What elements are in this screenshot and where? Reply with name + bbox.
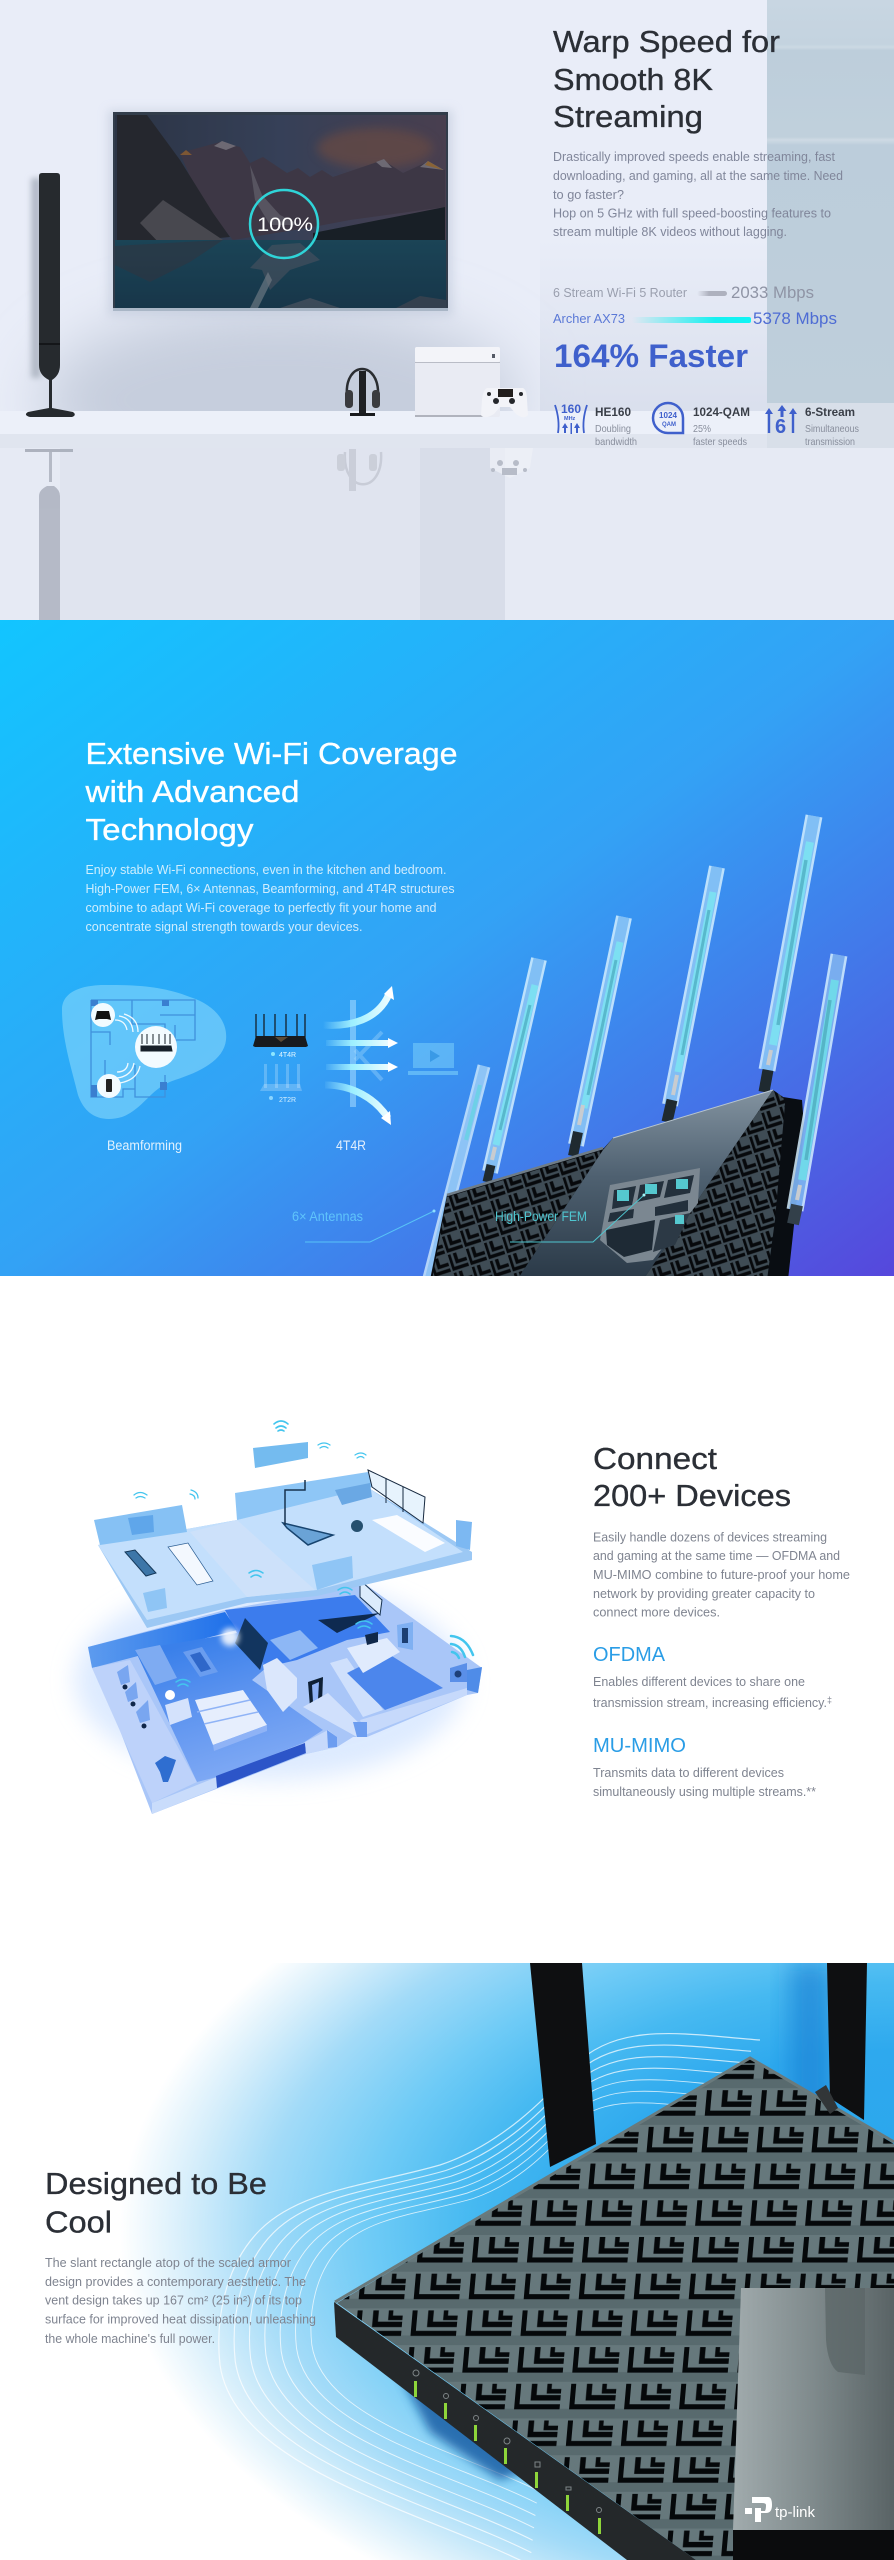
- glass panels: [360, 1580, 382, 1615]
- gamepad: [95, 1011, 111, 1020]
- floor plan lines: [91, 1000, 195, 1097]
- heading: extensive coverage: [84, 736, 458, 847]
- text block: speed description: [553, 149, 843, 239]
- text block: speed description: downloading, and gaming, all at the same time. Need: [553, 168, 843, 183]
- wifi signal icons: [134, 1421, 473, 1686]
- feature: MU-MIMO: [593, 1735, 816, 1799]
- icon: 1024 QAM: [653, 403, 683, 433]
- illustration: isometric smart home: [75, 1421, 482, 1814]
- feature: 6-Stream: transmission: [805, 436, 855, 448]
- upper floor: [94, 1470, 472, 1628]
- wifi: upper right: [355, 1453, 366, 1458]
- antenna 3: [573, 917, 624, 1156]
- feature: MU-MIMO: simultaneously using multiple streams.**: [593, 1784, 816, 1799]
- lamp glow: [221, 1628, 239, 1646]
- feature: 6-Stream: [765, 405, 859, 448]
- icon: 1024 QAM: 1024: [659, 410, 677, 420]
- status icons: [413, 2370, 602, 2512]
- wall shading: [28, 311, 532, 411]
- antenna 5: [764, 816, 814, 1092]
- feature: 1024-QAM: 25%: [693, 423, 711, 435]
- icon: 160 MHz: [555, 402, 587, 434]
- bed: [195, 1690, 267, 1745]
- heading: warp speed: Warp Speed for: [553, 24, 780, 59]
- heading: connect 200+ devices: 200+ Devices: [593, 1478, 791, 1513]
- headphones reflection: [337, 449, 381, 491]
- soft glow under house: [75, 1580, 465, 1780]
- phone: [106, 1079, 112, 1092]
- wifi: large outdoor: [451, 1636, 473, 1658]
- callout: high-power FEM: [495, 1194, 646, 1242]
- right room floor: [347, 1653, 443, 1710]
- panel: warp speed streaming room scene: [0, 0, 894, 620]
- front lip: [152, 1777, 217, 1814]
- blue gradient background: [0, 620, 894, 1276]
- upper left wall: [94, 1505, 187, 1545]
- cabinets: [143, 1588, 167, 1612]
- panel: designed to be cool: [0, 1963, 894, 2560]
- device circles: [135, 1026, 177, 1068]
- shelf front: [0, 434, 767, 448]
- back wall band: [88, 1612, 237, 1668]
- feature: OFDMA: transmission stream, increasing efficiency.: [593, 1695, 827, 1710]
- bottom window: [216, 1743, 306, 1788]
- text block: coverage description: High-Power FEM, 6× Antennas, Beamforming, and 4T4R structures: [86, 881, 455, 896]
- coffee table: [183, 1647, 218, 1677]
- callout: 6× antennas: [292, 1209, 436, 1242]
- text block: device description: [593, 1530, 850, 1620]
- text block: cooling description: [45, 2255, 316, 2346]
- beam arcs: [115, 1014, 140, 1083]
- logo: tp-link: tp-link: [775, 2504, 815, 2521]
- nightstand and lamp: [165, 1698, 192, 1725]
- left walkway: [92, 1660, 197, 1803]
- feature: OFDMA: [593, 1644, 832, 1710]
- text block: cooling description: the whole machine's full power.: [45, 2331, 215, 2346]
- heading: connect 200+ devices: [593, 1441, 791, 1513]
- text block: device description: network by providing greater capacity to: [593, 1586, 815, 1601]
- feature: 1024-QAM: faster speeds: [693, 436, 747, 448]
- icon: 1024 QAM: QAM: [662, 422, 676, 428]
- heading: designed to be cool: Cool: [45, 2204, 112, 2240]
- glass panels: [368, 1470, 425, 1523]
- router base: [733, 2530, 894, 2560]
- router right vent: [643, 1090, 785, 1280]
- icon: 160 MHz: MHz: [564, 416, 576, 422]
- bar chart: speed comparison: 5378 Mbps: [753, 309, 837, 328]
- feature: HE160: Doubling: [595, 423, 631, 435]
- console reflection band: [420, 448, 505, 620]
- progress ring with 100%: [250, 190, 318, 258]
- icon: headphones: [345, 369, 380, 416]
- status LEDs: [414, 2381, 601, 2534]
- text block: device description: connect more devices.: [593, 1604, 720, 1620]
- sofa: [135, 1645, 177, 1685]
- wifi: ac: [318, 1443, 330, 1448]
- wifi: upper left: [134, 1492, 147, 1498]
- mini router: [141, 1034, 172, 1051]
- plant: [155, 1756, 176, 1782]
- router top with armor pattern: [335, 2058, 894, 2560]
- wardrobe: [397, 1622, 413, 1650]
- callout: high-power FEM: High-Power FEM: [495, 1209, 587, 1224]
- callout: 164% faster: 164% Faster: [554, 338, 748, 374]
- router body: [430, 1090, 804, 1280]
- feature: 6-Stream: Simultaneous: [805, 423, 859, 435]
- heading: warp speed: Smooth 8K: [553, 62, 713, 97]
- text block: speed description: Drastically improved speeds enable streaming, fast: [553, 149, 835, 164]
- lower floor: [88, 1580, 482, 1814]
- feature: MU-MIMO: MU-MIMO: [593, 1735, 686, 1757]
- text block: cooling description: surface for improved heat dissipation, unleashing: [45, 2312, 316, 2326]
- right front wall: [360, 1688, 467, 1735]
- text block: speed description: stream multiple 8K videos without lagging.: [553, 224, 787, 239]
- right room wall: [330, 1658, 383, 1717]
- bar chart: speed comparison: 2033 Mbps: [731, 283, 814, 302]
- antenna 2: [487, 959, 539, 1182]
- heading: extensive coverage: Extensive Wi-Fi Coverage: [86, 736, 457, 771]
- antenna 6: [793, 955, 839, 1224]
- door: [308, 1677, 323, 1707]
- router slate panel: [517, 1090, 773, 1280]
- diagram: 4T4R signal: 2T2R: [279, 1097, 296, 1104]
- text block: cooling description: The slant rectangle atop of the scaled armor: [45, 2255, 292, 2270]
- feature: OFDMA: Enables different devices to share one: [593, 1674, 805, 1689]
- wifi: gym: [190, 1490, 198, 1499]
- text block: coverage description: concentrate signal strength towards your devices.: [86, 919, 362, 934]
- heading: connect 200+ devices: Connect: [593, 1441, 717, 1476]
- heading: designed to be cool: [45, 2166, 267, 2240]
- icon: speaker: [26, 173, 75, 417]
- lower floor base: [88, 1584, 482, 1814]
- antenna right: [827, 1963, 867, 2120]
- lighter strip base: [767, 403, 894, 448]
- feature: 1024-QAM: [653, 403, 750, 448]
- router chip layout: [600, 1168, 700, 1263]
- tv stand: [235, 1618, 268, 1670]
- kitchen floor: [225, 1595, 390, 1667]
- upper right wall: [235, 1472, 372, 1520]
- bar chart: speed comparison: [553, 283, 837, 328]
- antenna 1: [428, 1066, 484, 1282]
- feature: OFDMA: OFDMA: [593, 1644, 666, 1666]
- logo: tp-link: [745, 2497, 815, 2522]
- router front edge: [334, 2302, 696, 2560]
- text block: coverage description: combine to adapt Wi-Fi coverage to perfectly fit your home and: [86, 900, 436, 915]
- text block: device description: and gaming at the same time — OFDMA and: [593, 1548, 840, 1563]
- icon: six stream arrows: 6: [775, 416, 786, 438]
- hallway wall: [303, 1693, 363, 1737]
- shelf top: [20, 411, 540, 434]
- heading: warp speed: [553, 24, 780, 134]
- heading: extensive coverage: Technology: [86, 812, 254, 847]
- front pillar: [353, 1722, 367, 1737]
- wall background: [0, 0, 767, 411]
- feature: OFDMA: ‡: [827, 1695, 832, 1705]
- speaker reflection: [25, 449, 73, 620]
- progress ring with 100%: 100%: [257, 215, 313, 236]
- text block: speed description: to go faster?: [553, 187, 624, 202]
- cabinet: [263, 1658, 297, 1712]
- tv landscape: [115, 115, 446, 308]
- ghost side arrows: [355, 1032, 382, 1080]
- router glossy plate: [733, 2288, 894, 2530]
- desk: [347, 1638, 400, 1673]
- speakers: [450, 1663, 467, 1682]
- white lounge and mat: [168, 1543, 213, 1585]
- icon: white game console: [415, 347, 500, 417]
- kitchen counter: [270, 1630, 318, 1660]
- signal wall: [350, 1000, 356, 1107]
- panel: connect devices: [0, 1276, 894, 1963]
- right end wall: [456, 1520, 472, 1550]
- right lip and pillar: [305, 1730, 337, 1754]
- diagram: 4T4R signal: 4T4R: [279, 1052, 296, 1059]
- wifi: middle: [249, 1570, 263, 1577]
- antenna 4: [667, 867, 717, 1122]
- text block: cooling description: vent design takes up 167 cm² (25 in²) of its top: [45, 2292, 302, 2308]
- feature: HE160: [554, 404, 636, 445]
- wifi: lower kitchen: [338, 1588, 352, 1594]
- text block: coverage description: [86, 862, 455, 934]
- bedroom floor: [135, 1633, 323, 1782]
- wifi: top: [274, 1421, 288, 1431]
- router shadow: [400, 2375, 530, 2480]
- icon: 160 MHz: 160: [561, 402, 581, 416]
- icon: game controller: [481, 388, 528, 417]
- chairs: [117, 1665, 150, 1723]
- label: beamforming: Beamforming: [107, 1138, 182, 1153]
- white background: [0, 1276, 894, 1963]
- television: [108, 110, 453, 316]
- text block: speed description: Hop on 5 GHz with full speed-boosting features to: [553, 206, 831, 220]
- background window strip: [767, 0, 894, 403]
- heading: warp speed: Streaming: [553, 99, 703, 134]
- text block: device description: MU-MIMO combine to future-proof your home: [593, 1567, 850, 1582]
- text block: device description: Easily handle dozens of devices streaming: [593, 1530, 827, 1544]
- icon: laptop with play button: [408, 1043, 458, 1075]
- feature: 6-Stream: 6-Stream: [805, 405, 855, 419]
- heading: extensive coverage: with Advanced: [84, 774, 300, 809]
- wifi: lower right: [356, 1621, 372, 1628]
- beam arrows: [323, 994, 392, 1118]
- label: 4T4R: 4T4R: [336, 1138, 366, 1153]
- wifi: sofa: [176, 1680, 190, 1686]
- air conditioner: [253, 1442, 308, 1468]
- router left vent: [432, 1150, 603, 1280]
- text panel shade: [540, 330, 767, 411]
- kitchen table: [318, 1613, 380, 1633]
- upper left wall tv: [128, 1515, 154, 1535]
- antenna left: [530, 1963, 596, 2167]
- antennas behind router: [428, 816, 814, 1282]
- airflow wave lines: [219, 2034, 760, 2560]
- diagram: 4T4R signal: [253, 986, 458, 1125]
- bar chart: speed comparison: 6 Stream Wi-Fi 5 Router: [553, 285, 688, 300]
- antenna connector: [815, 2085, 838, 2114]
- bar chart: speed comparison: Archer AX73: [553, 311, 625, 326]
- fitness machines: [125, 1550, 156, 1576]
- feature: 1024-QAM: 1024-QAM: [693, 405, 750, 419]
- diagram: beamforming floor plan: [62, 985, 226, 1119]
- blue radial background: [0, 1963, 894, 2560]
- corridor: [190, 1520, 315, 1597]
- text block: cooling description: design provides a contemporary aesthetic. The: [45, 2274, 306, 2289]
- icon: black router 4T4R: [253, 1014, 308, 1047]
- heading: designed to be cool: Designed to Be: [45, 2166, 267, 2201]
- deep blue highlight: [790, 1963, 830, 2143]
- speaker shadow: [31, 178, 41, 378]
- text block: coverage description: Enjoy stable Wi-Fi connections, even in the kitchen and bedroom.: [86, 862, 446, 877]
- callout: 6× antennas: 6× Antennas: [292, 1209, 363, 1224]
- left reflection tone: [60, 448, 420, 620]
- panel: wi-fi coverage: [0, 620, 894, 1282]
- feature: HE160: HE160: [595, 405, 631, 419]
- icon: ghost router 2T2R: [260, 1064, 302, 1091]
- area below shelf: [58, 448, 60, 449]
- feature: MU-MIMO: Transmits data to different devices: [593, 1765, 784, 1780]
- controller reflection: [490, 448, 527, 476]
- feature: HE160: bandwidth: [595, 436, 637, 448]
